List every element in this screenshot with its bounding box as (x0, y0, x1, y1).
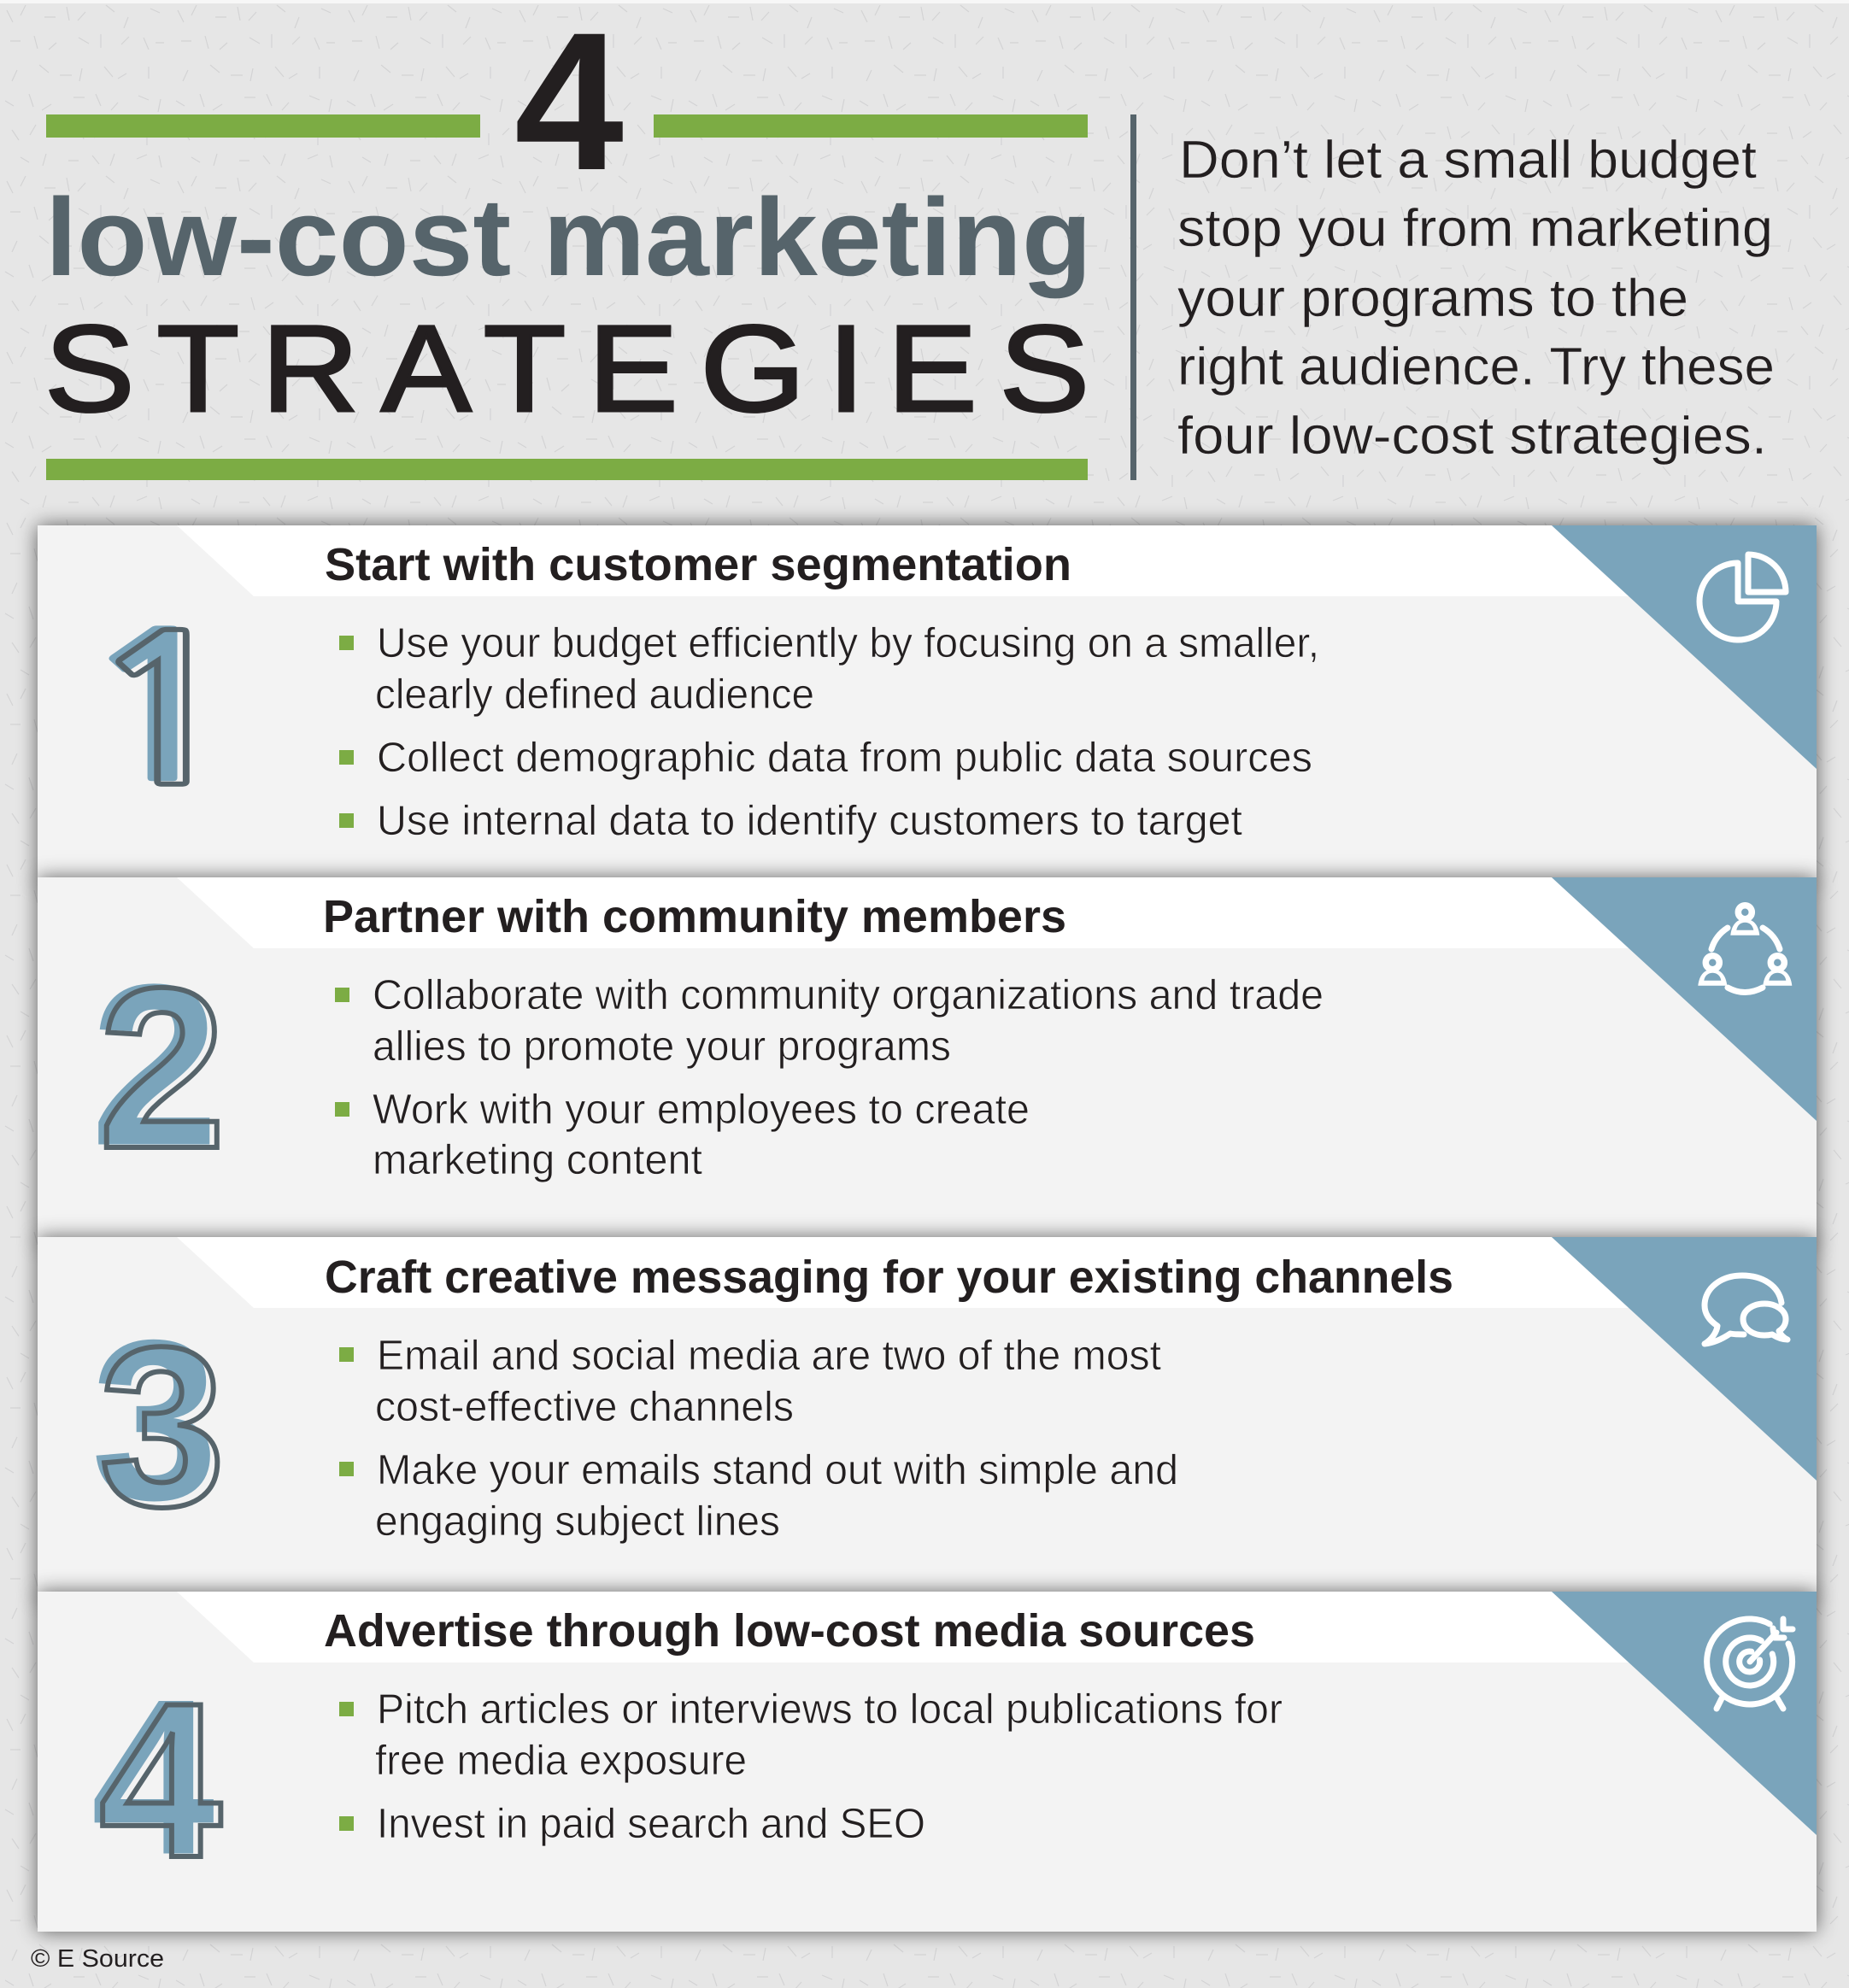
heading 3: Craft creative messaging for your existing channels (325, 1252, 1453, 1303)
green rule: bottom (46, 459, 1088, 480)
corner triangle 2 (1552, 877, 1817, 1121)
bullet list 1: Collect demographic data from public data sources (377, 735, 1312, 781)
bullet list 4 (339, 1686, 1283, 1847)
intro text (1177, 131, 1775, 466)
bullet list 1: Use internal data to identify customers to target (377, 798, 1242, 844)
corner triangle 4 (1552, 1592, 1817, 1835)
number 3: 3 (91, 1293, 218, 1547)
bullet list 4: Invest in paid search and SEO (377, 1801, 925, 1847)
panel 4: low-cost media (38, 1592, 1817, 1932)
bullet list 2: Work with your employees to create (373, 1087, 1030, 1133)
vertical divider (1130, 114, 1136, 480)
bullet list 2: allies to promote your programs (373, 1023, 951, 1070)
bullet list 3 (339, 1333, 1178, 1545)
intro text: Don’t let a small budget (1179, 131, 1757, 190)
number 2: 2 (98, 940, 226, 1196)
icon: people in a circle (1698, 906, 1792, 993)
intro text: stop you from marketing (1177, 199, 1773, 258)
title block (44, 0, 1092, 480)
heading 1: Start with customer segmentation (325, 539, 1071, 590)
intro text: right audience. Try these (1177, 337, 1775, 396)
number 3: 3 (99, 1300, 226, 1554)
bullet list 4: free media exposure (375, 1738, 747, 1784)
number 1: 1 (75, 609, 238, 811)
corner triangle 3 (1552, 1237, 1817, 1481)
bullet list 3: cost-effective channels (375, 1384, 794, 1430)
bullet list 1: Use your budget efficiently by focusing on a smaller, (377, 620, 1319, 666)
bullet list 3: Make your emails stand out with simple and (377, 1447, 1178, 1493)
intro text: four low-cost strategies. (1177, 407, 1767, 466)
number 4: 4 (99, 1657, 223, 1903)
icon: pie chart (1699, 554, 1786, 640)
copyright: © E Source (31, 1945, 164, 1973)
corner triangle 1 (1552, 525, 1817, 769)
title line: low-cost marketing: low-cost marketing (45, 176, 1092, 299)
intro text: your programs to the (1177, 269, 1688, 328)
bullet list 3: Email and social media are two of the most (377, 1333, 1161, 1379)
number 2: 2 (91, 936, 219, 1193)
bullet list 1 (339, 620, 1319, 844)
green rule: top right (654, 114, 1088, 138)
number 1: 1 (85, 613, 247, 814)
icon: speech bubbles (1705, 1275, 1787, 1344)
bullet list 2: marketing content (373, 1137, 702, 1183)
title line: strategies: STRATEGIES (44, 301, 1089, 437)
bullet list 1: clearly defined audience (375, 671, 814, 718)
green rule: top left (46, 114, 480, 138)
bullet list 2 (335, 972, 1324, 1183)
bullet list 3: engaging subject lines (375, 1498, 780, 1545)
heading 2: Partner with community members (323, 891, 1066, 942)
icon: target with arrow (1707, 1619, 1793, 1709)
bullet list 2: Collaborate with community organizations and trade (373, 972, 1324, 1018)
panel 2: community members (38, 877, 1817, 1245)
number 4: 4 (91, 1653, 215, 1900)
bullet list 4: Pitch articles or interviews to local publications for (377, 1686, 1283, 1733)
heading 4: Advertise through low-cost media sources (324, 1605, 1255, 1657)
panel 1: customer segmentation (38, 525, 1817, 884)
panel 3: creative messaging (38, 1237, 1817, 1600)
